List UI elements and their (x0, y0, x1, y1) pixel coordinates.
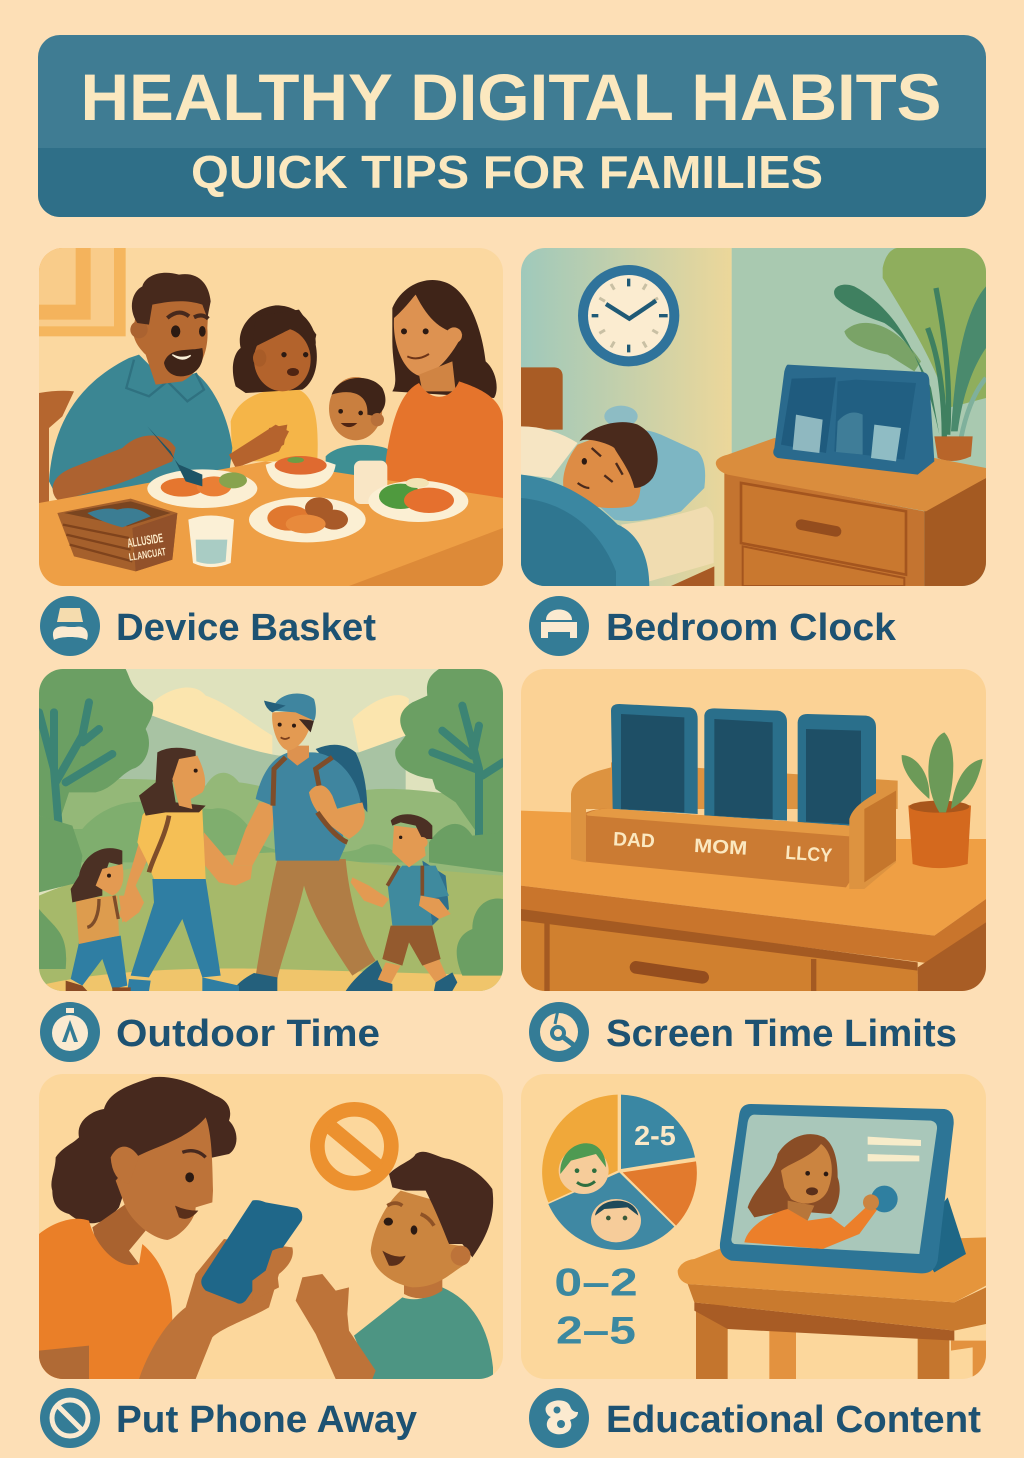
basket with devices: LLANCUAT (128, 546, 167, 564)
son hiking (351, 814, 457, 991)
icon: basket (40, 596, 100, 656)
label: outdoor time: Outdoor Time (116, 1013, 380, 1055)
subtitle: QUICK TIPS FOR FAMILIES (191, 146, 823, 198)
panel: outdoor time family hike illustration (39, 669, 503, 991)
panel: screen time limits charging station illustration (521, 669, 986, 991)
icon: learning symbol (529, 1388, 589, 1448)
mother with phone (39, 1077, 302, 1379)
wooden organizer with names: DAD (613, 829, 655, 852)
label: outdoor time (40, 1002, 380, 1062)
wall clock (578, 265, 679, 366)
potted plant (902, 732, 983, 868)
label: screen time limits: Screen Time Limits (606, 1013, 957, 1055)
no phone sign (317, 1109, 391, 1183)
icon: timer (529, 1002, 589, 1062)
plates of food (147, 426, 468, 542)
basket with devices (57, 499, 177, 571)
age pie chart (542, 1095, 697, 1250)
boy talking (296, 1152, 493, 1379)
mother at table (386, 280, 503, 508)
mother hiking (119, 748, 252, 991)
boy at table (326, 377, 388, 475)
panel: educational content illustration (521, 1074, 986, 1379)
wooden organizer with names (586, 781, 896, 889)
wooden organizer back (571, 762, 898, 862)
panel: put phone away illustration (39, 1074, 503, 1379)
label: device basket (40, 596, 376, 656)
title: HEALTHY DIGITAL HABITS (80, 60, 941, 134)
age labels (556, 1268, 636, 1344)
glass of water (188, 515, 234, 567)
icon: prohibited (40, 1388, 100, 1448)
desk (521, 811, 986, 991)
icon: compass (40, 1002, 100, 1062)
label: device basket: Device Basket (116, 607, 376, 649)
side table (678, 1237, 986, 1379)
label: put phone away (40, 1388, 417, 1448)
label: educational content (529, 1388, 981, 1448)
dresser (716, 438, 986, 586)
sleeping child in bed (521, 406, 714, 586)
daughter hiking (66, 848, 144, 991)
father (49, 273, 289, 501)
table (39, 461, 503, 586)
icon: bed (529, 596, 589, 656)
father hiking (232, 693, 392, 991)
age labels: 2–5 (556, 1308, 636, 1352)
three tablets (611, 704, 876, 826)
girl at table (231, 305, 318, 461)
wooden organizer with names: LLCY (785, 843, 833, 867)
label: bedroom clock: Bedroom Clock (606, 607, 897, 649)
plant (834, 285, 986, 461)
age labels: 0–2 (554, 1261, 638, 1305)
header banner (38, 35, 986, 217)
wooden organizer with names: MOM (693, 836, 748, 860)
trees and bushes (39, 669, 503, 976)
label: educational content: Educational Content (606, 1399, 981, 1441)
age pie chart: 2-5 (634, 1120, 676, 1151)
basket with devices: ALLUSIDE (126, 531, 164, 550)
panel: device basket family dinner illustration (39, 248, 503, 586)
label: put phone away: Put Phone Away (116, 1399, 417, 1441)
label: screen time limits (529, 1002, 957, 1062)
panel: bedroom clock illustration (521, 248, 986, 586)
tablet with video lesson (720, 1104, 966, 1273)
label: bedroom clock (529, 596, 897, 656)
tablet on stand (773, 365, 934, 475)
